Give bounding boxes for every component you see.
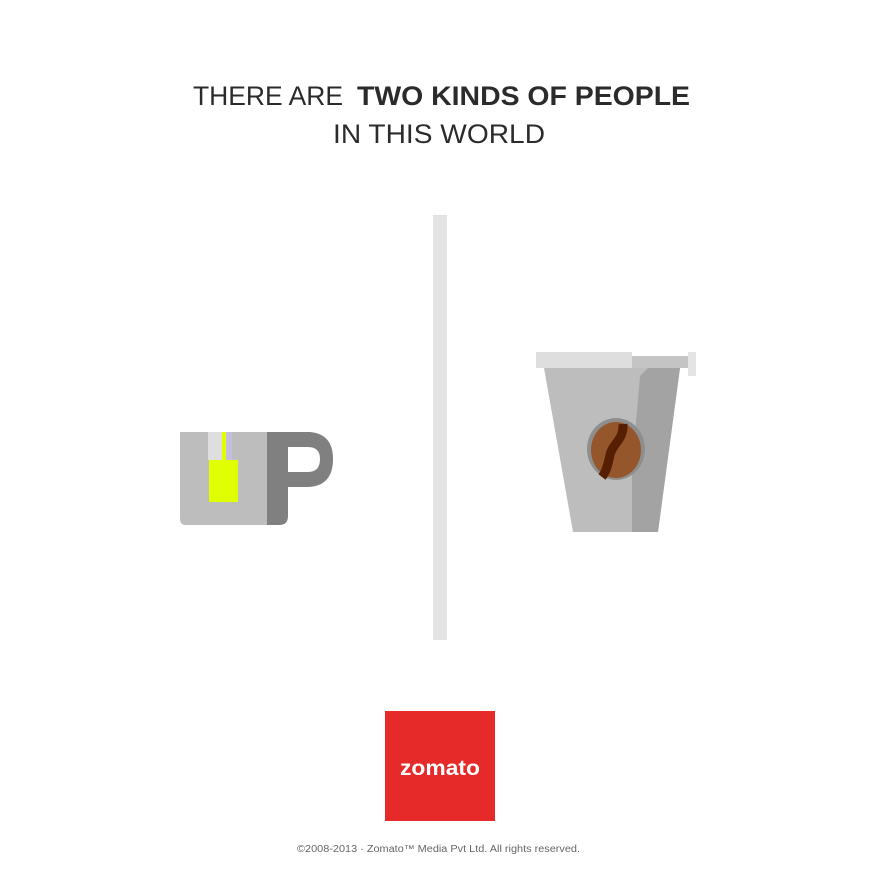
title: TWO KINDS OF PEOPLE xyxy=(357,81,690,111)
copyright: ©2008-2013 · Zomato™ Media Pvt Ltd. All rights reserved. xyxy=(297,844,580,855)
coffee bean xyxy=(587,418,645,480)
tea bag string xyxy=(222,432,226,460)
tea bag string highlight xyxy=(226,432,232,460)
title: IN THIS WORLD xyxy=(333,119,545,149)
cup lid xyxy=(536,352,632,368)
title xyxy=(193,81,690,149)
title: THERE ARE xyxy=(193,81,343,111)
central divider xyxy=(433,215,447,640)
logo: zomato: zomato xyxy=(400,757,480,780)
tea bag string shade xyxy=(208,432,222,460)
cup body xyxy=(544,368,680,532)
mug dark side xyxy=(267,432,288,525)
tea bag xyxy=(209,460,238,502)
cup shaded side xyxy=(632,368,680,532)
mug light body xyxy=(180,432,267,525)
icon: coffee cup xyxy=(536,352,696,532)
logo: zomato xyxy=(385,711,495,821)
icon: tea mug xyxy=(180,432,333,525)
mug handle xyxy=(285,432,333,487)
